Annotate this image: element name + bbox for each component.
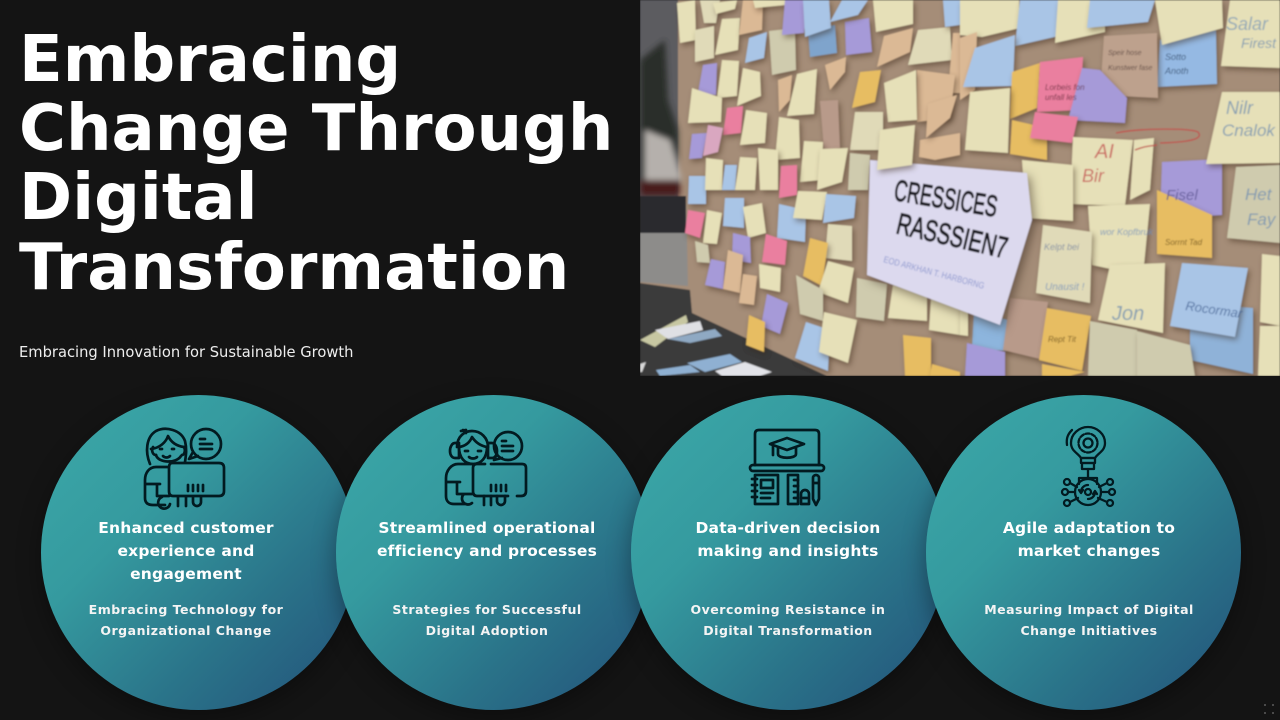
sign: RASSSIEN7 [893, 208, 1011, 265]
handwriting: Salar [1226, 14, 1269, 34]
card 4 text: market changes [1018, 542, 1160, 560]
card 1 text: engagement [130, 565, 242, 583]
card 1 text: Organizational Change [100, 623, 272, 638]
handwriting: Unausit ! [1045, 282, 1085, 293]
handwriting: Cnalok [1222, 121, 1276, 140]
photo: wall of sticky notes [640, 0, 1280, 376]
card 3 text [691, 519, 885, 638]
card 1 text [89, 519, 283, 638]
handwriting: Rocormar [1185, 298, 1244, 321]
handwriting: Kunstwer fase [1108, 65, 1152, 72]
card 3 text: Data-driven decision [695, 519, 881, 537]
handwriting: Lorbeis fon [1045, 83, 1085, 92]
card 2 text: Digital Adoption [426, 623, 548, 638]
handwriting [1044, 14, 1277, 344]
card 4 text: Measuring Impact of Digital [984, 602, 1194, 617]
handwriting: Jon [1111, 303, 1144, 325]
circle 3 [631, 395, 946, 710]
handwriting: Bir [1082, 166, 1105, 186]
note overlapping the sign [877, 125, 915, 170]
handwriting: Kelpt bei [1044, 242, 1080, 252]
handwriting: Nilr [1226, 98, 1254, 118]
card 4 text: Change Initiatives [1020, 623, 1158, 638]
handwriting: Rept Tit [1048, 335, 1077, 344]
card 1 text: experience and [117, 542, 255, 560]
handwriting: Speir hose [1108, 50, 1142, 57]
handwriting: Het [1245, 185, 1273, 204]
handwriting: Firest [1241, 35, 1277, 51]
handwriting: Sorrnt Tad [1165, 238, 1203, 247]
handwriting: unfall les [1045, 93, 1077, 102]
card 2 text [377, 519, 597, 638]
card 4 text [984, 519, 1194, 638]
circle 1 [41, 395, 356, 710]
corner dots [1264, 704, 1274, 714]
sign [867, 160, 1032, 325]
card 1 text: Embracing Technology for [89, 602, 283, 617]
card 3 text: Overcoming Resistance in [691, 602, 885, 617]
card 1 text: Enhanced customer [98, 519, 274, 537]
handwriting: wor Kopfbruk [1100, 227, 1154, 237]
card 2 text: efficiency and processes [377, 542, 597, 560]
handwriting: AI [1094, 141, 1114, 163]
title: Embracing Change Through Digital Transformation [19, 23, 613, 305]
card 2 text: Streamlined operational [378, 519, 596, 537]
card 3 text: making and insights [697, 542, 879, 560]
handwriting: Fisel [1166, 187, 1198, 204]
card 3 text: Digital Transformation [703, 623, 873, 638]
card 4 text: Agile adaptation to [1003, 519, 1175, 537]
sign: EOD ARKHAN T. HARBORNG [882, 254, 986, 291]
circle 2 [336, 395, 651, 710]
sign: CRESSICES [892, 175, 1000, 224]
handwriting: Sotto [1165, 52, 1186, 62]
handwriting: Fay [1247, 210, 1277, 229]
handwriting: Anoth [1164, 66, 1189, 76]
circle 4 [926, 395, 1241, 710]
card 2 text: Strategies for Successful [392, 602, 582, 617]
subtitle: Embracing Innovation for Sustainable Growth [19, 344, 353, 361]
